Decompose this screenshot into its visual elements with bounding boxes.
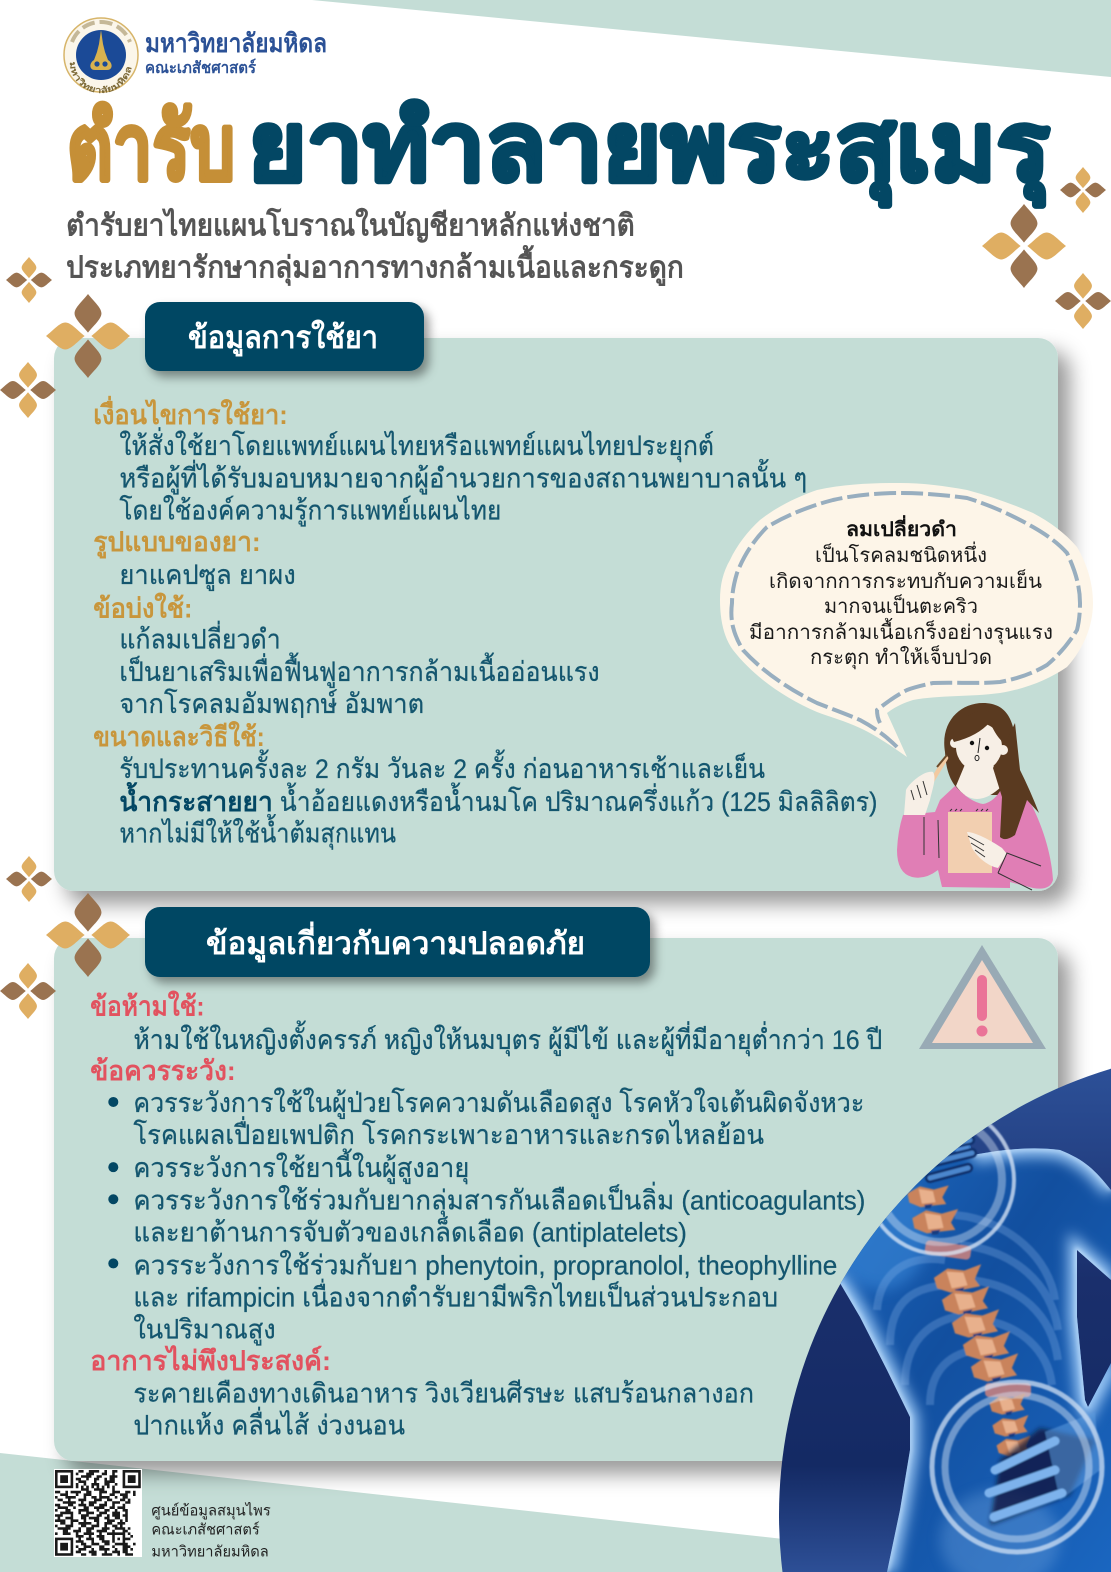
bubble text: มากจนเป็นตะคริว bbox=[824, 593, 978, 618]
footer: source credit: มหาวิทยาลัยมหิดล bbox=[151, 1544, 269, 1561]
icon: warning triangle bbox=[919, 945, 1046, 1049]
indications: จากโรคลมอัมพฤกษ์ อัมพาต bbox=[119, 688, 424, 719]
illustration: woman thinking with notepad bbox=[897, 703, 1053, 890]
bubble text: กระตุก ทำให้เจ็บปวด bbox=[810, 644, 992, 670]
lower lens rings bbox=[932, 1382, 1102, 1552]
dose and method: น้ำอ้อยแดงหรือน้ำนมโค ปริมาณครึ่งแก้ว (125 มิลลิลิตร) bbox=[280, 782, 877, 817]
dosage form: รูปแบบของยา: bbox=[93, 526, 261, 559]
adverse effects: ระคายเคืองทางเดินอาหาร วิงเวียนศีรษะ แสบร้อนกลางอก bbox=[133, 1377, 754, 1408]
panel: safety information bbox=[54, 907, 1058, 1461]
conditions of use bbox=[93, 395, 807, 526]
bubble text bbox=[749, 514, 1053, 670]
ornament cluster: upper left bbox=[0, 257, 130, 418]
bubble text: มีอาการกล้ามเนื้อเกร็งอย่างรุนแรง bbox=[749, 618, 1053, 645]
upper lens rings bbox=[879, 1124, 1017, 1257]
footer: source credit: ศูนย์ข้อมูลสมุนไพร bbox=[151, 1502, 271, 1521]
ornament cluster: upper right bbox=[982, 167, 1111, 329]
illustration: anatomical back and spine bbox=[770, 1040, 1111, 1572]
body silhouette bbox=[840, 1140, 1111, 1572]
precautions: โรคแผลเปื่อยเพปติก โรคกระเพาะอาหารและกรดไหลย้อน bbox=[133, 1116, 764, 1150]
ribs bbox=[877, 1215, 1058, 1405]
precautions: ควรระวังการใช้ร่วมกับยา phenytoin, propranolol, theophylline bbox=[133, 1249, 837, 1280]
logo wordmark: มหาวิทยาลัยมหิดล bbox=[145, 28, 327, 58]
logo: Mahidol University bbox=[63, 17, 139, 94]
precautions bbox=[90, 1055, 865, 1346]
tab heading: usage information bbox=[145, 302, 424, 371]
contraindications bbox=[90, 991, 882, 1057]
logo wordmark: คณะเภสัชศาสตร์ bbox=[145, 58, 256, 77]
indications: แก้ลมเปลี่ยวดำ bbox=[119, 621, 281, 655]
tab heading: usage information: ข้อมูลการใช้ยา bbox=[188, 319, 378, 357]
indications: เป็นยาเสริมเพื่อฟื้นฟูอาการกล้ามเนื้ออ่อนแรง bbox=[119, 652, 600, 688]
precautions: ข้อควรระวัง: bbox=[90, 1055, 236, 1086]
QR code bbox=[54, 1469, 142, 1557]
conditions of use: โดยใช้องค์ความรู้การแพทย์แผนไทย bbox=[119, 494, 501, 526]
adverse effects: อาการไม่พึงประสงค์: bbox=[90, 1345, 331, 1376]
speech bubble: definition bbox=[720, 483, 1093, 757]
conditions of use: เงื่อนไขการใช้ยา: bbox=[93, 395, 288, 430]
conditions of use: หรือผู้ที่ได้รับมอบหมายจากผู้อำนวยการของสถานพยาบาลนั้น ๆ bbox=[119, 458, 807, 494]
dosage form bbox=[93, 526, 296, 591]
logo wordmark bbox=[145, 28, 327, 77]
indications: ข้อบ่งใช้: bbox=[93, 593, 193, 624]
spine vertebrae bbox=[906, 1182, 1031, 1457]
footer: source credit: คณะเภสัชศาสตร์ bbox=[151, 1521, 260, 1539]
dose and method: น้ำกระสายยา bbox=[119, 781, 273, 817]
subtitle: ตำรับยาไทยแผนโบราณในบัญชียาหลักแห่งชาติ bbox=[66, 207, 635, 244]
ornament cluster: lower left bbox=[0, 856, 130, 1019]
precautions: ในปริมาณสูง bbox=[133, 1314, 276, 1346]
bubble text: ลมเปลี่ยวดำ bbox=[846, 514, 957, 541]
panel background bbox=[54, 338, 1058, 891]
footer: source credit bbox=[151, 1502, 271, 1561]
dose and method: ขนาดและวิธีใช้: bbox=[93, 721, 265, 752]
dose and method: รับประทานครั้งละ 2 กรัม วันละ 2 ครั้ง ก่อนอาหารเช้าและเย็น bbox=[119, 749, 765, 784]
precautions: ควรระวังการใช้ในผู้ป่วยโรคความดันเลือดสูง โรคหัวใจเต้นผิดจังหวะ bbox=[133, 1087, 864, 1119]
precautions: ควรระวังการใช้ยานี้ในผู้สูงอายุ bbox=[133, 1148, 469, 1185]
tab heading: safety information bbox=[145, 907, 650, 977]
adverse effects bbox=[90, 1345, 754, 1440]
tab heading: safety information: ข้อมูลเกี่ยวกับความปลอดภัย bbox=[206, 921, 585, 963]
dose and method bbox=[93, 721, 877, 850]
precautions: ควรระวังการใช้ร่วมกับยากลุ่มสารกันเลือดเป็นลิ่ม (anticoagulants) bbox=[133, 1181, 865, 1217]
precautions: และ rifampicin เนื่องจากตำรับยามีพริกไทยเป็นส่วนประกอบ bbox=[133, 1279, 778, 1313]
conditions of use: ให้สั่งใช้ยาโดยแพทย์แผนไทยหรือแพทย์แผนไทยประยุกต์ bbox=[119, 427, 714, 463]
precautions: และยาต้านการจับตัวของเกล็ดเลือด (antiplatelets) bbox=[133, 1214, 687, 1247]
logo: Mahidol University: มหาวิทยาลัยมหิดล bbox=[70, 62, 132, 94]
bubble text: เกิดจากการกระทบกับความเย็น bbox=[769, 568, 1042, 593]
panel background bbox=[54, 938, 1058, 1461]
indications bbox=[93, 593, 600, 719]
bubble text: เป็นโรคลมชนิดหนึ่ง bbox=[815, 541, 987, 567]
contraindications: ห้ามใช้ในหญิงตั้งครรภ์ หญิงให้นมบุตร ผู้มีไข้ และผู้ที่มีอายุต่ำกว่า 16 ปี bbox=[133, 1020, 882, 1057]
dosage form: ยาแคปซูล ยาผง bbox=[119, 559, 296, 591]
dose and method: หากไม่มีให้ใช้น้ำต้มสุกแทน bbox=[119, 813, 396, 850]
neck and upper hand bbox=[924, 1136, 978, 1184]
title: ตำรับ bbox=[67, 97, 235, 199]
title: ยาทำลายพระสุเมรุ bbox=[248, 94, 1050, 207]
panel: usage information bbox=[54, 302, 1058, 891]
subtitle: ประเภทยารักษากลุ่มอาการทางกล้ามเนื้อและกระดูก bbox=[66, 245, 684, 287]
contraindications: ข้อห้ามใช้: bbox=[90, 991, 205, 1022]
adverse effects: ปากแห้ง คลื่นไส้ ง่วงนอน bbox=[133, 1406, 405, 1440]
lower hand bbox=[989, 1412, 1100, 1525]
subtitle bbox=[66, 207, 684, 287]
